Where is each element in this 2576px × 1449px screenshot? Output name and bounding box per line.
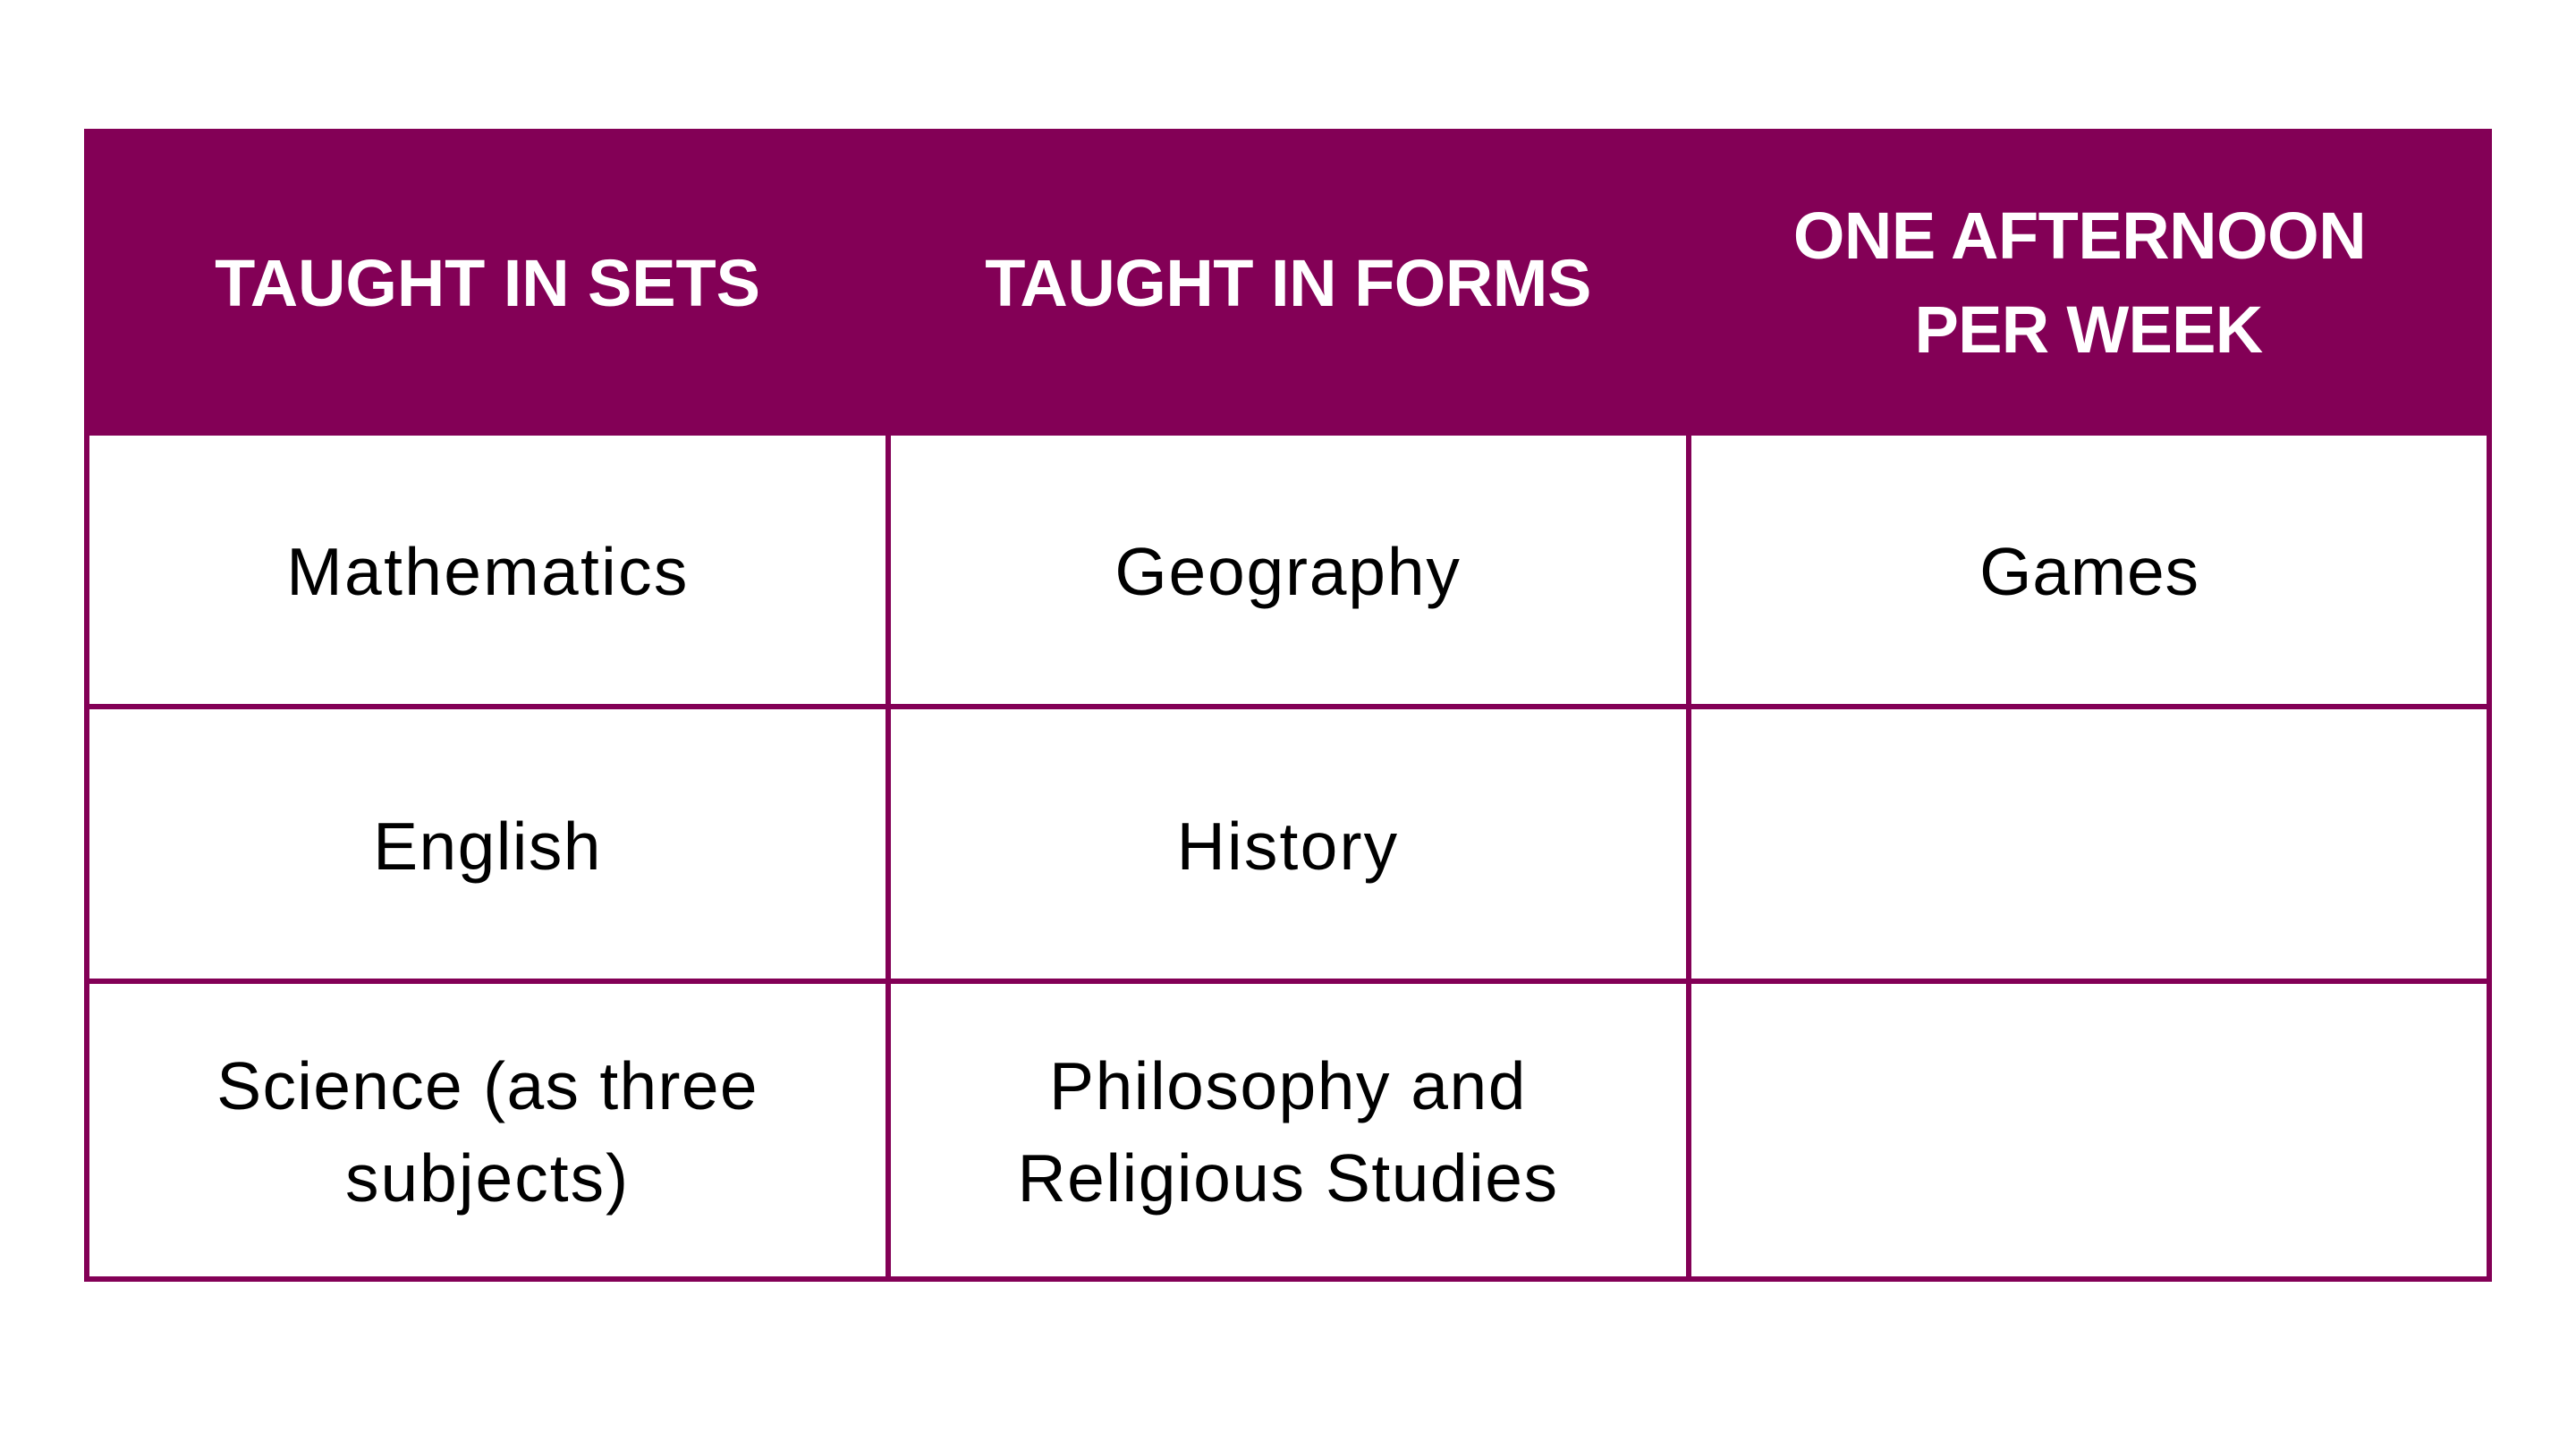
cell: history: History [1177, 809, 1399, 884]
cell: science as three subjects [216, 1048, 758, 1216]
panel: header row [84, 129, 2492, 436]
cell: philosophy and religious studies: Religious Studies [1018, 1140, 1558, 1216]
heading: one afternoon per week: ONE AFTERNOON [1793, 199, 2366, 273]
panel: table body and grid [84, 129, 2492, 1282]
cell: geography: Geography [1114, 534, 1462, 609]
heading: taught in sets: TAUGHT IN SETS [215, 246, 760, 320]
cell: philosophy and religious studies: Philosophy and [1049, 1048, 1527, 1123]
cell: games: Games [1979, 534, 2199, 609]
cell: mathematics: Mathematics [286, 534, 690, 609]
cell: english: English [373, 809, 602, 884]
cell: philosophy and religious studies [1018, 1048, 1558, 1216]
heading: one afternoon per week [1793, 199, 2366, 367]
heading: one afternoon per week: PER WEEK [1914, 292, 2263, 367]
cell: science as three subjects: Science (as three [216, 1048, 758, 1123]
heading: taught in forms: TAUGHT IN FORMS [985, 246, 1591, 320]
cell: science as three subjects: subjects) [345, 1140, 630, 1216]
table [84, 129, 2492, 1282]
